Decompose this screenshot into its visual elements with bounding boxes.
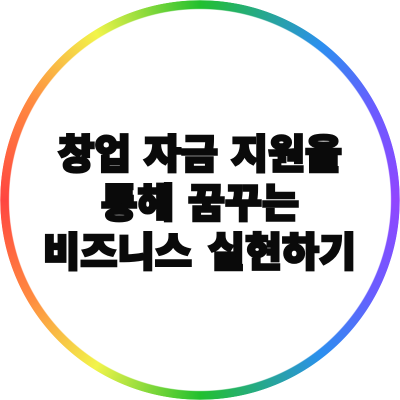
title line 1 bbox=[58, 133, 342, 177]
title line 2: 통해 bbox=[101, 182, 174, 226]
title line 1: 자금 bbox=[144, 133, 218, 177]
title line 3: 실현하기 bbox=[208, 231, 356, 275]
title line 2 bbox=[101, 182, 299, 226]
title line 3 bbox=[43, 231, 356, 275]
title line 3: 비즈니스 bbox=[43, 231, 192, 275]
title line 1: 지원을 bbox=[231, 133, 342, 177]
title line 2: 꿈꾸는 bbox=[188, 182, 299, 226]
title line 1: 창업 bbox=[58, 133, 131, 177]
